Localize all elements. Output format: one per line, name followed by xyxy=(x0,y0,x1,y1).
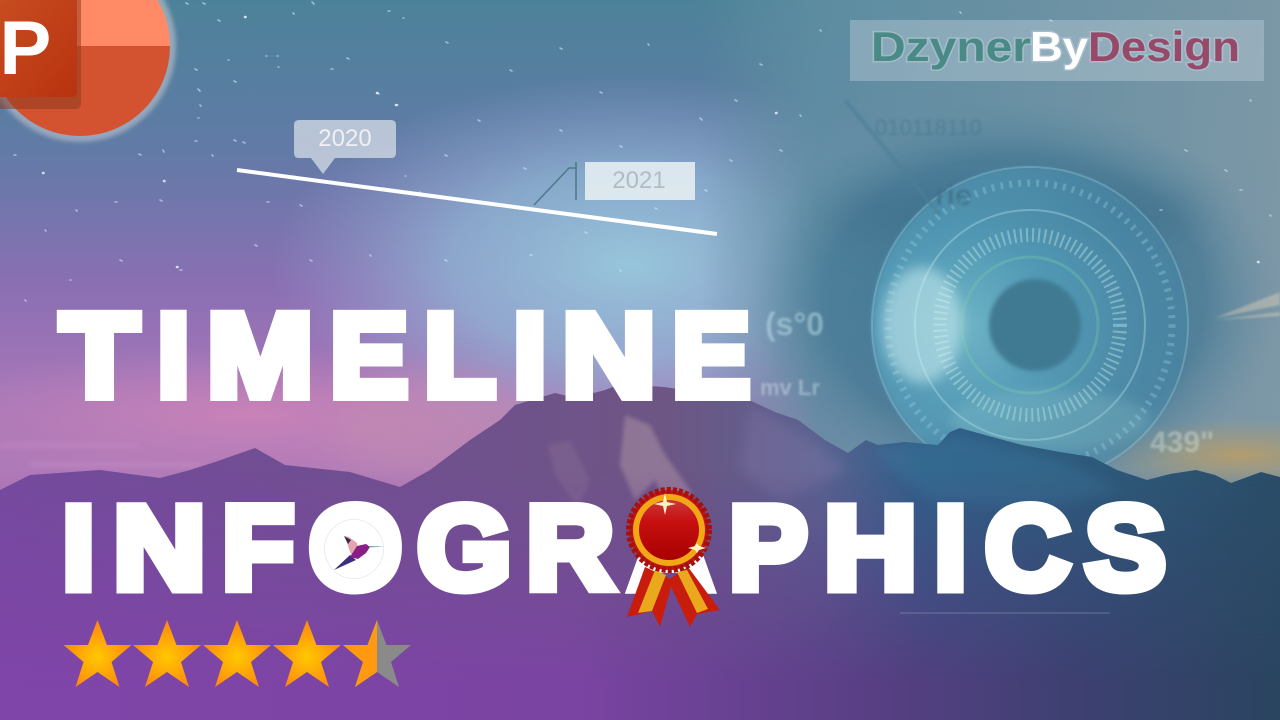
brand logo: DzynerByDesign: By xyxy=(1030,23,1089,70)
callout: 2020 xyxy=(294,120,396,174)
title: INFOGRAPHICS: N xyxy=(113,482,206,614)
star field xyxy=(14,2,1271,301)
title: TIMELINE: E xyxy=(672,290,750,422)
title: TIMELINE: I xyxy=(513,290,546,422)
title: TIMELINE: E xyxy=(330,290,408,422)
icon: award ribbon rosette xyxy=(627,490,720,627)
title: INFOGRAPHICS: I xyxy=(934,482,966,614)
PowerPoint logo: P xyxy=(0,6,51,91)
technological eye overlay: 010118110 xyxy=(875,115,982,140)
title: INFOGRAPHICS: C xyxy=(985,482,1070,614)
technological eye overlay: rie xyxy=(935,179,972,212)
callout: 2020: 2020 xyxy=(318,125,372,152)
mountain range: 439" xyxy=(1150,426,1214,459)
icon: hummingbird in the letter O xyxy=(322,517,386,581)
PowerPoint logo xyxy=(0,0,176,142)
title: TIMELINE: T xyxy=(61,290,138,422)
technological eye overlay xyxy=(750,100,1280,500)
timeline line xyxy=(237,170,717,234)
title: INFOGRAPHICS: A xyxy=(629,482,713,614)
brand logo: DzynerByDesign: Design xyxy=(1088,23,1240,70)
technological eye overlay: (s°0 xyxy=(765,306,824,342)
brand logo: DzynerByDesign: Dzyner xyxy=(871,23,1031,70)
title: INFOGRAPHICS: R xyxy=(526,482,614,614)
title: INFOGRAPHICS: S xyxy=(1085,482,1166,614)
title: TIMELINE: N xyxy=(562,290,656,422)
title: INFOGRAPHICS: I xyxy=(62,482,94,614)
title: TIMELINE: M xyxy=(207,290,313,422)
mountain range xyxy=(0,384,1280,720)
technological eye overlay: mv Lr xyxy=(760,375,820,400)
title: INFOGRAPHICS: G xyxy=(417,482,511,614)
title: INFOGRAPHICS: O xyxy=(309,482,402,614)
title: INFOGRAPHICS: H xyxy=(824,482,917,614)
title: TIMELINE: I xyxy=(158,290,190,422)
title: INFOGRAPHICS: F xyxy=(222,482,294,614)
star rating: 4.5 of 5 xyxy=(64,620,411,687)
title: TIMELINE: L xyxy=(424,290,495,422)
callout: 2021 xyxy=(534,162,695,205)
brand logo: DzynerByDesign xyxy=(850,20,1264,81)
title: INFOGRAPHICS: P xyxy=(729,482,807,614)
callout: 2021: 2021 xyxy=(612,167,666,194)
